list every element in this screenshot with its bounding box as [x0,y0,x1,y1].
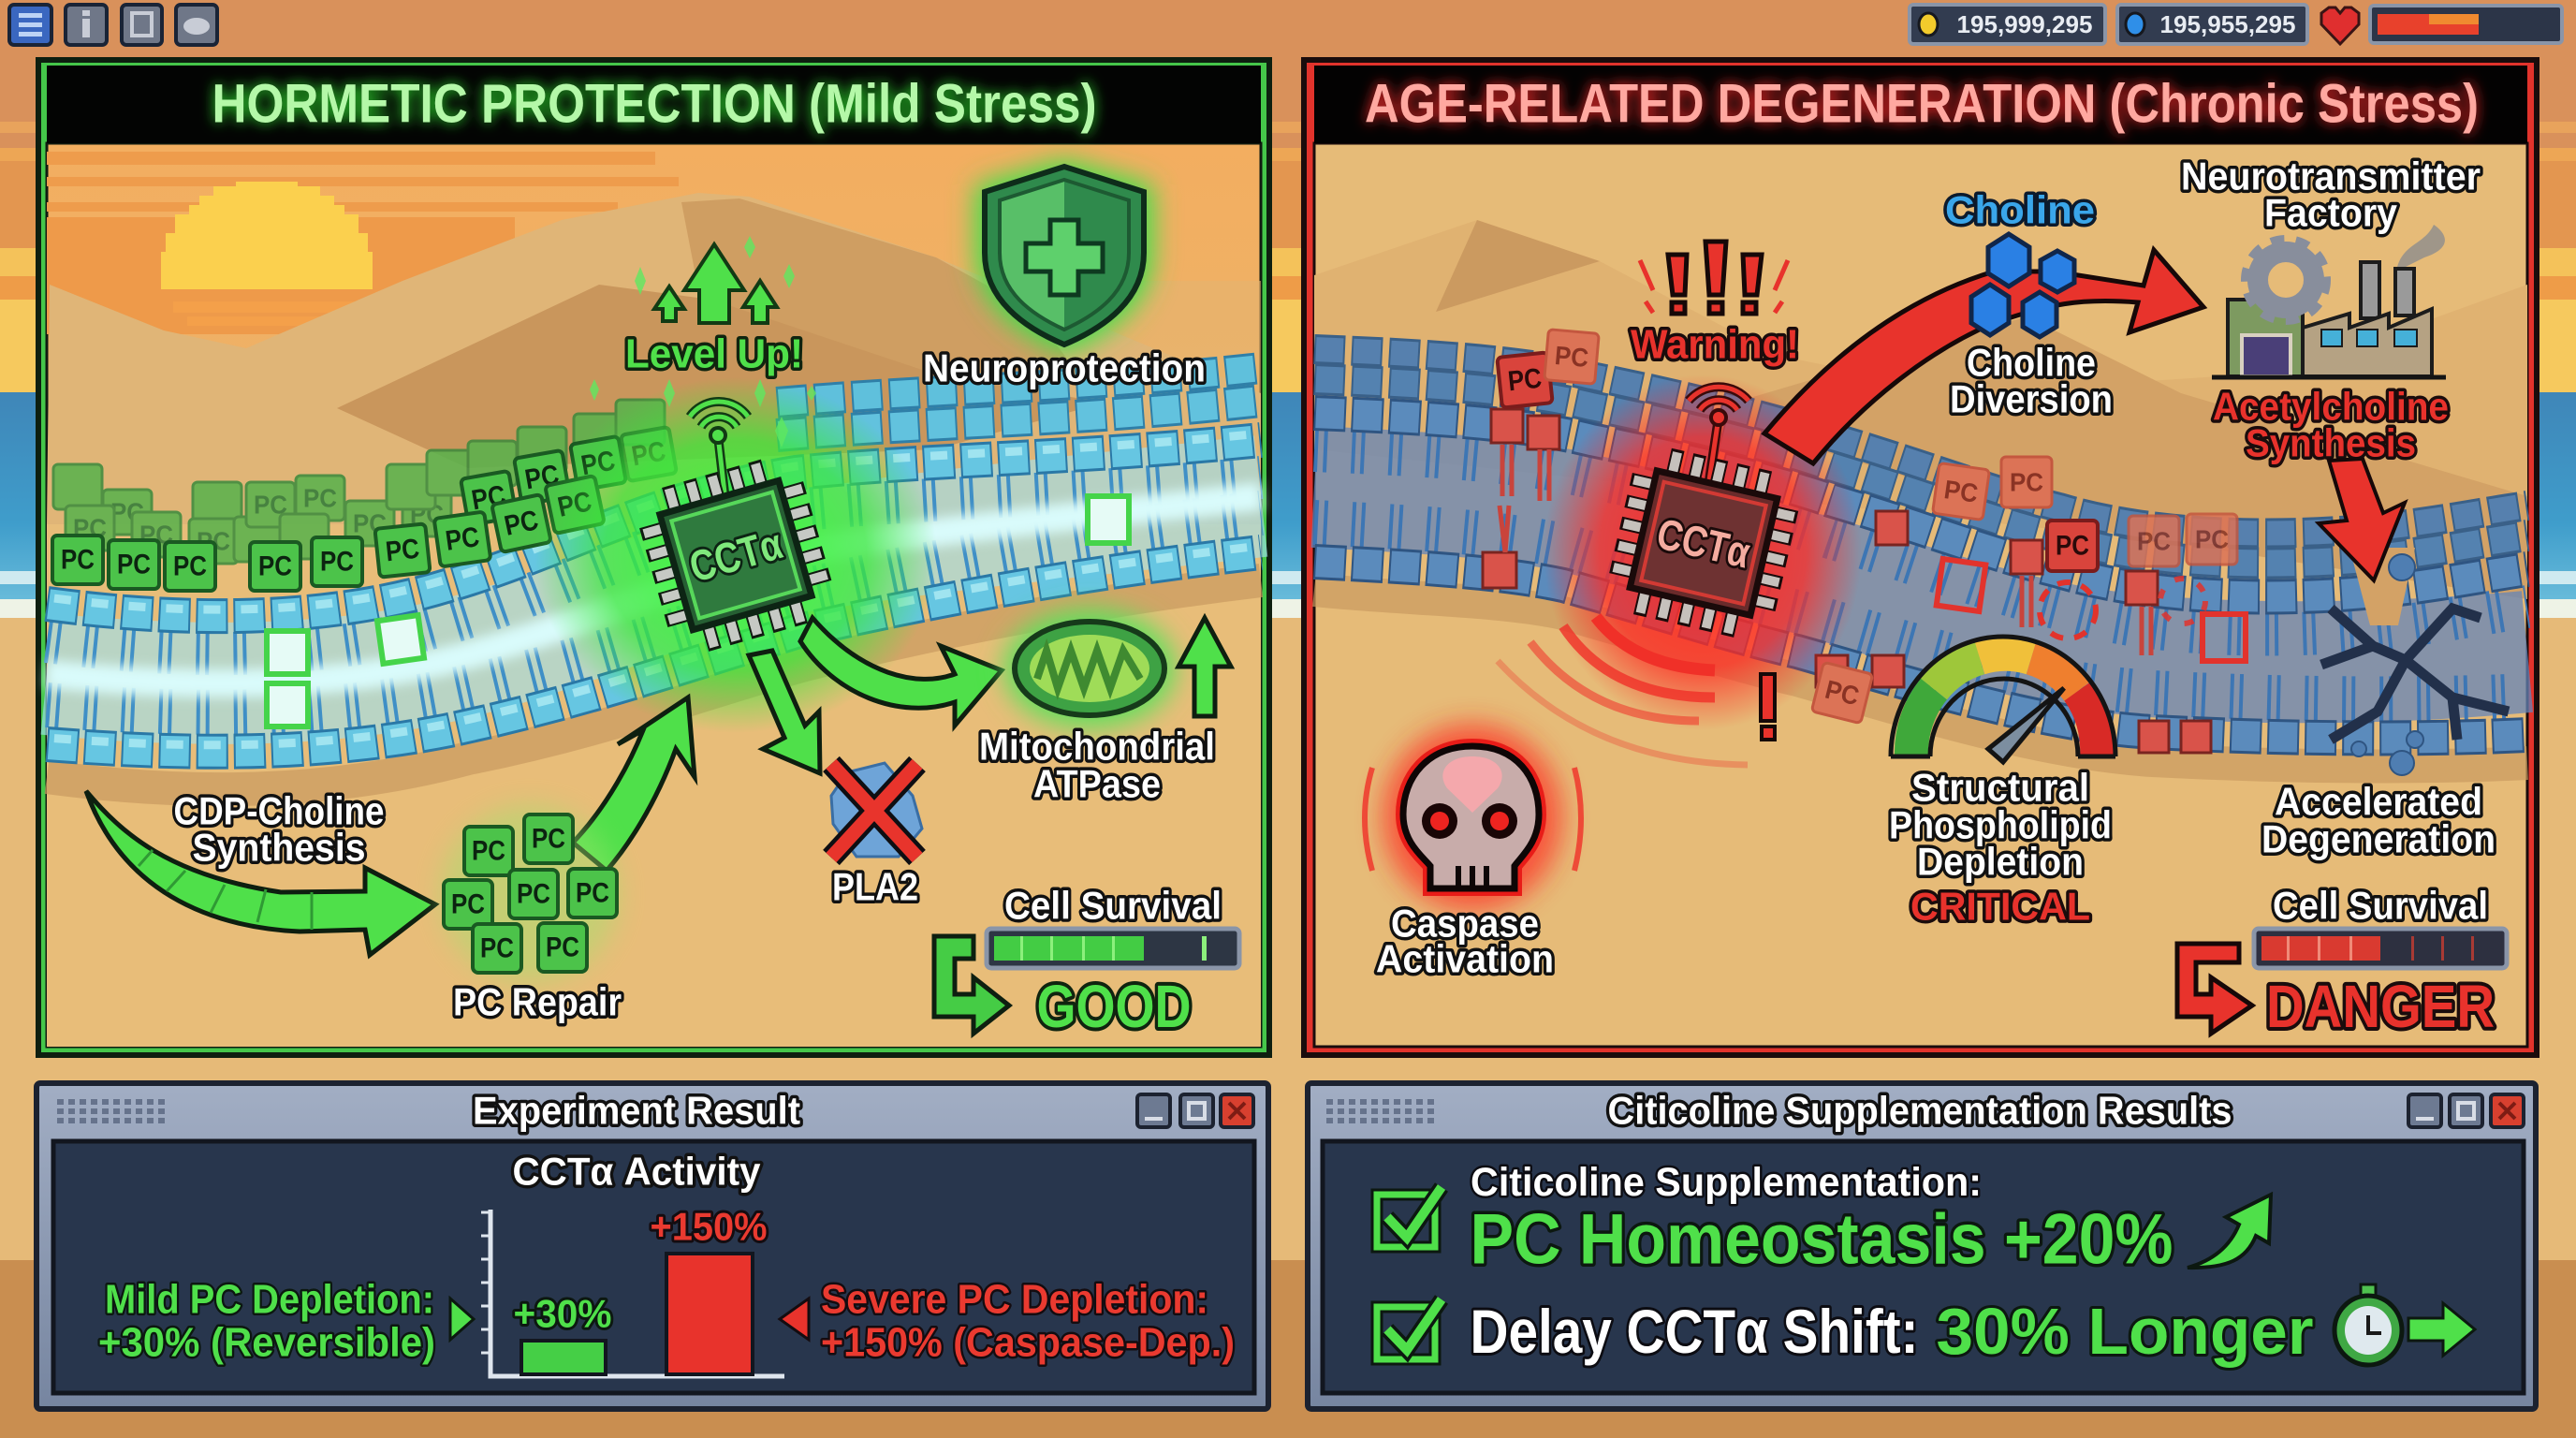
faded PC lipid tiles: PC [353,509,387,537]
label: CDP-Choline Synthesis: CDP-Choline [174,788,384,833]
arrow: survival elbow danger [2177,944,2252,1034]
faded PC lipid tiles [53,400,665,564]
HUD: top-left menu buttons [9,5,217,45]
faded PC lipid tiles: PC [410,500,444,528]
PC lipid tiles, damaged: PC [1942,475,1980,508]
icon: CCTα enzyme chip: CCTα [684,519,787,592]
panel frame [1304,60,2537,1055]
crack in membrane [2321,548,2509,775]
PC repair cluster: PC [576,878,609,908]
label: Cell Survival: Cell Survival [1004,884,1222,927]
arrow: degeneration down [2319,459,2405,580]
green PC lipid tiles: PC [444,521,481,557]
sun [161,182,373,326]
title bar grip [57,1102,168,1121]
PC lipid tiles, damaged: PC [2056,530,2089,562]
green PC lipid tiles: PC [522,460,562,495]
PC repair cluster: PC [472,835,505,867]
PC repair cluster [441,805,619,983]
membrane gaps [1937,559,2246,661]
label: Warning: Warning! [1631,322,1799,367]
green PC lipid tiles [52,427,677,591]
text: PC homeostasis: PC Homeostasis +20% [1470,1200,2174,1279]
icon: CCTα enzyme chip [648,402,824,643]
sand dunes [47,193,1261,1047]
label: Caspase Activation: Activation [1376,936,1554,981]
window title: Experiment Result [473,1088,800,1133]
gauge: structural phospholipid depletion [1891,637,2115,762]
label: Structural Phospholipid Depletion: Depletion [1917,839,2084,884]
bar chart: CCTα activity: +150% [650,1204,768,1249]
label: Accelerated Degeneration: Accelerated [2275,779,2482,824]
PC repair cluster: PC [532,824,565,854]
legend: severe PC depletion: Severe PC Depletion: [821,1277,1208,1322]
window: citicoline supplementation results [1308,1083,2536,1409]
HUD: gem counter: 195,955,295 [2160,10,2295,38]
faded PC lipid tiles: PC [73,513,107,543]
label: Neurotransmitter Factory: Factory [2264,191,2398,234]
label: GOOD: GOOD [1037,973,1191,1040]
faded PC lipid tiles: PC [197,526,230,556]
window: experiment result [37,1083,1268,1409]
icon: choline molecules [1971,234,2074,337]
PC lipid tiles, damaged [1497,330,2237,724]
green PC lipid tiles: PC [117,549,151,580]
title bar grip [1326,1102,1438,1121]
wifi antenna [1689,387,1749,487]
arrow: CDP-choline synthesis [86,791,435,955]
label: Choline: Choline [1945,187,2095,232]
phospholipid membrane [47,368,1261,752]
faded PC lipid tiles: PC [303,483,337,513]
degraded membrane [1314,349,2527,738]
gauge: cell survival good [987,929,1239,968]
label: Structural Phospholipid Depletion: Phospholipid [1889,803,2112,846]
text: delay CCTα shift: Delay CCTα Shift: [1470,1297,1919,1366]
legend: severe PC depletion: +150% (Caspase-Dep.) [821,1320,1235,1365]
label: Mitochondrial ATPase: ATPase [1033,762,1161,805]
icon: CCTα stressed chip: CCTα [1652,508,1755,578]
label: Acetylcholine Synthesis [2213,384,2449,464]
green PC lipid tiles: PC [173,550,207,582]
scene backdrop [1314,143,2527,1047]
HUD: heart and health bar [2321,6,2562,44]
title bar: hormetic [47,66,1261,143]
signal waves [1498,617,1748,765]
label: Caspase Activation [1376,901,1554,981]
arrow: rising [2188,1195,2271,1268]
icon: stopwatch with arrow [2334,1284,2475,1365]
green PC lipid tiles: PC [555,486,594,523]
PC lipid tiles, damaged: PC [2010,468,2043,496]
label: PC Repair: PC Repair [453,979,622,1024]
chip glow [534,377,937,733]
green PC lipid tiles: PC [578,446,618,481]
HUD: coin counter: 195,999,295 [1956,10,2093,38]
arrow: survival elbow good [934,936,1009,1034]
icon: warning exclamation [1761,674,1775,740]
icon: mitochondrion [1003,609,1176,728]
PC lipid tiles, damaged: PC [2137,526,2171,556]
green PC lipid tiles: PC [320,547,354,577]
green PC lipid tiles: PC [629,436,668,472]
HUD: gem counter [2117,5,2307,44]
icon: CCTα stressed chip [1618,387,1789,628]
icon: check 1 [1377,1187,1442,1247]
PC lipid tiles, damaged: PC [2195,524,2229,554]
label: CRITICAL: CRITICAL [1910,884,2090,929]
legend: severe PC depletion [780,1277,1235,1365]
label: Choline Diversion [1950,341,2113,421]
window buttons [2408,1094,2524,1127]
bar chart: CCTα activity: +30% [513,1292,612,1335]
label: Accelerated Degeneration: Degeneration [2261,816,2496,861]
window body [53,1141,1254,1393]
PC repair cluster: PC [517,878,550,910]
PC lipid tiles, damaged: PC [1554,341,1589,373]
icon: caspase skull [1365,724,1581,911]
label: Choline Diversion: Choline [1967,341,2096,384]
arrow: choline diversion [1764,250,2203,463]
window body [1323,1141,2524,1393]
PC repair cluster: PC [451,889,485,919]
red damaged lipids [1483,409,2211,753]
arrow: chip to PLA2 [749,651,820,773]
PC lipid tiles, damaged: PC [1506,363,1544,397]
label: Structural Phospholipid Depletion: Structural [1911,766,2089,809]
icon: neuroprotection shield [975,159,1153,354]
green PC lipid tiles: PC [258,550,292,582]
wifi antenna [690,402,748,501]
label: Cell Survival: Cell Survival [2273,884,2488,927]
label: Mitochondrial ATPase [979,725,1215,805]
label: CDP-Choline Synthesis [174,788,384,869]
label: Acetylcholine Synthesis: Synthesis [2246,421,2416,464]
chip glow [1544,374,1862,730]
panel frame [38,60,1269,1055]
window title: Citicoline Supplementation Results [1608,1088,2232,1133]
gauge: cell survival danger [2254,929,2507,968]
PC lipid tiles, damaged: PC [1822,675,1862,711]
icon: PLA2 crossed out [831,763,922,858]
label: PLA2: PLA2 [832,865,918,908]
window frame [37,1083,1268,1409]
faded PC lipid tiles: PC [139,521,173,549]
window frame [1308,1083,2536,1409]
legend: mild PC depletion: Mild PC Depletion: [105,1277,434,1322]
window buttons [1137,1094,1253,1127]
label: CDP-Choline Synthesis: Synthesis [193,826,365,869]
green PC lipid tiles: PC [469,480,508,516]
label: Neurotransmitter Factory: Neurotransmitter [2181,154,2481,198]
label: Acetylcholine Synthesis: Acetylcholine [2213,384,2449,429]
label: DANGER: DANGER [2266,973,2495,1040]
label: Choline Diversion: Diversion [1950,376,2113,421]
chart title: CCTα Activity [513,1150,761,1193]
label: Caspase Activation: Caspase [1391,901,1539,946]
faded PC lipid tiles: PC [110,498,144,526]
faded PC lipid tiles: PC [254,491,287,519]
HUD: coin counter [1910,5,2105,44]
green PC lipid tiles: PC [502,505,541,542]
sparkles [590,236,816,448]
icon: neurotransmitter factory [2212,225,2446,377]
legend: mild PC depletion [98,1277,474,1365]
scene backdrop [47,143,1261,1047]
level up arrows [654,244,777,323]
bar chart: CCTα activity [481,1204,784,1376]
green PC lipid tiles: PC [384,534,421,567]
label: Neuroprotection: Neuroprotection [923,346,1206,389]
text: 30% longer: 30% Longer [1936,1295,2314,1368]
text: citicoline supplementation: Citicoline Supplementation: [1471,1160,1982,1205]
label: Level Up: Level Up! [625,331,803,376]
panel: age-related degeneration [1304,60,2537,1055]
membrane gaps [267,496,1129,726]
icon: check 2 [1377,1299,1442,1359]
label: Mitochondrial ATPase: Mitochondrial [979,725,1215,768]
arrow: PC repair to chip [573,697,695,871]
green PC lipid tiles: PC [61,545,95,575]
warning exclamations [1640,242,1788,314]
label: Accelerated Degeneration [2261,779,2496,861]
legend: mild PC depletion: +30% (Reversible) [98,1320,435,1365]
panel: hormetic protection [38,60,1269,1055]
PC repair cluster: PC [546,932,579,962]
arrow: chip to mitochondrion [800,618,1002,726]
label: Structural Phospholipid Depletion [1889,766,2112,884]
arrow: ATPase up [1178,618,1231,716]
title bar: hormetic: HORMETIC PROTECTION (Mild Stress) [212,73,1097,135]
PC repair cluster: PC [480,932,514,964]
label: Neurotransmitter Factory [2181,154,2481,234]
